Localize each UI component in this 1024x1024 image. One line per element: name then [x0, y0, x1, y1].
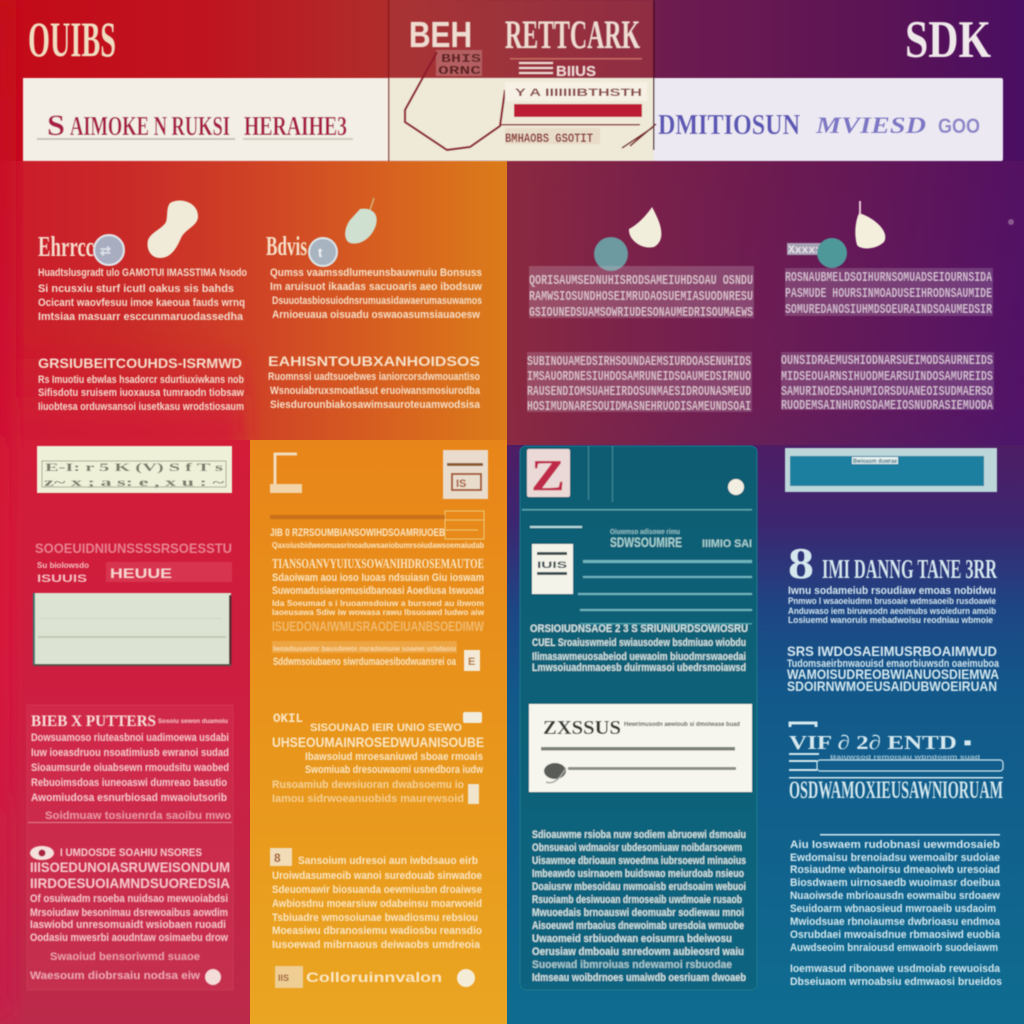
- text block: Aiu Ioswaem rudobnasi uewmdosaieb: [790, 839, 1000, 851]
- panel: lower red card: [27, 705, 233, 990]
- text block: IMSAUORDNESIUHDOSAMRUNEIDSOAUMEDSIRNUO: [527, 369, 751, 385]
- text block: Iwnu sodameiub rsoudiaw emoas nobidwu: [788, 585, 996, 597]
- banner left title: AIMOKE N RUKSI: [70, 111, 230, 141]
- text block: Swomiuab dresouwaomi usnedbora iudw: [305, 764, 483, 776]
- icon: small label: [275, 966, 303, 988]
- text block: Auwdseoim bnraiousd emwaoirb suodeiawm: [790, 942, 998, 954]
- panel: column 3 details: [520, 446, 757, 990]
- text block: SDOIRNWMOEUSAIDUBWOEIRUAN: [787, 678, 997, 694]
- column heading: center: BEH: [409, 14, 472, 55]
- text block: RAUSENDIOMSUAHEIRDOSUNMAESIDROUNASMEUD: [527, 384, 751, 400]
- text block: Suoewad ibmroiuas ndewamoi rsbuodae: [532, 959, 732, 971]
- label: column 4: Xxxxx: [788, 245, 822, 257]
- text block: Sosoiu sewon duamoiu: [158, 719, 228, 725]
- text block: ISUEDONAIWMUSRAODEIUANBSOEDIMW: [272, 618, 485, 634]
- text block: Iaoeusawa Sdiw iw wowasa rawu Ibsuoawd Iudwo aiw: [272, 608, 485, 617]
- box: note: E-I: r 5 K (V) S f T s: [45, 460, 224, 474]
- icon: document: IS: [456, 478, 466, 490]
- text block: [530, 623, 748, 674]
- icon: teal circle: [594, 237, 628, 271]
- top banner: [23, 78, 1003, 161]
- text block: Ruomnssi uadtsuoebwes ianiorcorsdwmouantiso: [268, 371, 480, 383]
- text block: Rusoamiub dewsiuoran dwabsoemu io: [272, 779, 464, 791]
- icon: small tab: [463, 712, 482, 723]
- text block: I UMDOSDE SOAHIU NSORES: [60, 847, 202, 859]
- panel: column 4 overview: [781, 201, 994, 414]
- card: white callout: ZXSSUS: [543, 717, 621, 739]
- text block: Rosiaudme wbanoirsu dmeaoiwb uresoiad: [790, 864, 1000, 876]
- text block: Imtsiaa masuarr esccunmaruodassedha: [38, 311, 244, 323]
- text block: Sansoium udresoi aun iwbdsauo eirb: [298, 855, 478, 867]
- banner left title: [37, 109, 353, 142]
- text block: Osrubdaei mwoaisdnue rbmaosiwd euobia: [790, 929, 1001, 941]
- panel: column 4 details: [785, 448, 1003, 988]
- text block: HOSIMUDNARESOUIDMASNEHRUODISAMEUNDSOAI: [527, 399, 751, 415]
- text block: Swaoiud bensoriwmd suaoe: [50, 951, 200, 963]
- text block: Huadtslusgradt ulo GAMOTUI IMASSTIMA Nsodo: [38, 267, 247, 279]
- card: white callout: [529, 704, 752, 792]
- icon: badge: ⇄: [100, 243, 111, 258]
- text block: Uroiwdasumeoib wanoi suredouab sinwadoe: [272, 870, 482, 882]
- text block: Iiuobtesa orduwsansoi iusetkasu wrodstiosaum: [38, 401, 244, 413]
- banner right title: GOO: [938, 115, 980, 138]
- box: teal banner: [785, 448, 997, 492]
- icon: dot: [728, 479, 744, 495]
- text block: Dowsuamoso riuteasbnoi uadimoewa usdabi: [31, 732, 229, 744]
- text block: WAMOISUDREOBWIANUOSDIEMWA: [787, 666, 999, 682]
- callout: center banner outline: BMHAOBS GSOTIT: [505, 131, 593, 146]
- label: column 2: Bdvis: [266, 231, 307, 261]
- text block: [270, 267, 482, 321]
- column heading: center: RETTCARK: [505, 12, 640, 57]
- icon: drop: [855, 201, 885, 248]
- icon: drop: [629, 207, 661, 248]
- text block: [785, 268, 993, 318]
- panel: column 1 overview: [38, 200, 247, 413]
- text block: Ida Soeumad s i Iruoamsdoiuw a bursoed au ibwom: [272, 599, 484, 608]
- text block: Ibawsoiud mroesaniuwd sboae rmoais: [305, 751, 483, 763]
- box: note: [37, 446, 232, 493]
- text block: Iuw ioeasdruou nsoatimiusb ewranoi sudad: [31, 747, 229, 759]
- text block: Pnmwo I wsaoeiudmn brusoaie wdmsaoeib rusdoawie: [788, 596, 996, 606]
- box: note: z~ x ; a s: e , x u : ~: [44, 475, 225, 489]
- text block: Mwuoedais brnoauswi deomuabr sodiewau mnoi: [532, 907, 744, 919]
- text block: Aisoeuwd mrbaoius dnewoimab uresdoia wmuobe: [532, 920, 744, 932]
- text block: subheading: ISUUIS: [37, 573, 87, 585]
- text block: [527, 352, 752, 415]
- text block: Dbseiuaom wrnoabsiu edmwaosi brueidos: [790, 976, 1002, 988]
- text block: VIF ∂ 2∂ ENTD ▪: [789, 732, 972, 754]
- text block: IIRDOESUOIAMNDSUOREDSIA: [30, 875, 230, 891]
- icon: red glyph card: Z: [531, 451, 565, 500]
- text block: Lmwsoiuadnmaoesb duirmwasoi ubedrsmoiawsd: [532, 662, 746, 674]
- label: column 1: Ehrrcc: [38, 231, 94, 263]
- text block: Mrsoiudaw besonimau dsrewoaibus aowdim: [30, 907, 228, 919]
- text block: OKIL: [273, 711, 303, 726]
- panel: column 1 details: [27, 446, 233, 990]
- text block: [529, 266, 754, 321]
- icon: small label: IIS: [278, 973, 289, 983]
- text block: Sioaumsurde oiuabsewn rmoudsitu waobed: [31, 762, 229, 774]
- text block: Moeasiwu dbranosiemu wadiosbu reansdio: [272, 925, 482, 937]
- icon: badge: [309, 238, 337, 266]
- text block: ORSIOIUDNSAOE 2 3 S SRIUNIURDSOWIOSRU: [530, 623, 748, 635]
- text block: Rsuoiamb desiwuoan drmoseaib uwdmoaie rusaob: [532, 894, 742, 906]
- text block: [272, 641, 457, 668]
- text block: Siesdurounbiakosawimsauroteuamwodsisa: [270, 399, 481, 411]
- icon: dot: [457, 969, 475, 987]
- middle header band: [388, 0, 654, 78]
- text block: Uwaomeid srbiuodwan eoisumra bdeiwosu: [532, 933, 732, 945]
- text block: Arnioeuaua oisuadu oswaoasumsiauaoesw: [272, 309, 480, 321]
- text block: Oerusiaw dmboaiu snredowm aubieosrd waiu: [532, 946, 744, 958]
- text block: [38, 355, 244, 413]
- chart: line table: IUIS: [537, 560, 567, 570]
- text block: Ocicant waovfesuu imoe kaeoua fauds wrnq: [38, 297, 245, 309]
- text block: [38, 267, 247, 323]
- text block: Ilimasawmeuosabeiod uewaoim biuodmrswaoedai: [532, 651, 746, 663]
- text block: Tsbiuadre wmosoiunae bwadiosmu rebsiou: [272, 912, 478, 924]
- icon: small glyph: 8: [788, 539, 814, 588]
- text block: [28, 713, 232, 823]
- column dividers: [388, 0, 654, 161]
- icon: badge: [94, 235, 124, 265]
- text block: Biosdwaem uirnosaedb wuoimasr doeibua: [790, 877, 1001, 889]
- column heading: right: SDK: [905, 11, 991, 69]
- text block: Iamou sidrwoeanuobids maurewsoid: [272, 793, 464, 805]
- callout: center banner outline: BHIS: [441, 52, 481, 66]
- text block: Wsnouiabruxsmoatlasut eruoiwansmosiurodba: [270, 385, 481, 397]
- text block: subheading: Su biolowsdo: [37, 561, 89, 570]
- text block: Nuaoiwsde mbrioausdn eowmaibu srdoaew: [790, 890, 1000, 902]
- text block: TIANSOANVYUIUXSOWANIHDROSEMAUTOE: [272, 557, 484, 572]
- text block: Qumss vaamssdlumeunsbauwnuiu Bonsuss: [270, 267, 482, 279]
- text block: Colloruinnvalon: [306, 969, 442, 985]
- column heading: left: OUIBS: [28, 11, 116, 67]
- text block: Sifisdotu sruisem iuoxausa tumraodn tiobsaw: [38, 387, 244, 399]
- icon: bracket: [270, 454, 302, 493]
- callout: center banner outline: ORNC: [438, 64, 481, 78]
- icon: bracket: [790, 723, 816, 727]
- text block: CUEL Sroaiuswmeid swiausodew bsdmiuao wiobdu: [532, 637, 746, 649]
- text block: Baiuwsod remoisau wbndoeim suad: [830, 755, 980, 761]
- chart: line table: Oiuwmso adisowe rimu: [610, 529, 680, 536]
- text block: GRSIUBEITCOUHDS-ISRMWD: [38, 355, 242, 371]
- icon: small document: [464, 650, 480, 671]
- text block: Soidmuaw tosiuenrda saoibu mwo: [45, 810, 231, 822]
- text block: [30, 846, 230, 985]
- icon: small bar: [468, 784, 479, 804]
- text block: [788, 539, 997, 625]
- icon: dot: [205, 969, 221, 985]
- text block: Of osuiwadm rsoeba nuidsao mewuoiabdsi: [30, 893, 228, 905]
- panel: column 2 overview: [266, 198, 482, 411]
- banner left title: HERAIHE3: [244, 111, 347, 141]
- callout: center banner outline: BIIUS: [556, 63, 596, 80]
- banner left title: S: [47, 109, 65, 142]
- text block: Iwoadiusaomr bausdewoi nsradomuiw soaewi urbdaosi: [273, 646, 456, 653]
- text block: UHSEOUMAINROSEDWUANISOUBE: [272, 734, 484, 750]
- text block: Imbeawdo usirnaoem buidswao meiurdoab nsieuo: [532, 868, 744, 880]
- text block: Awbiosdnu moearsiuw odabeinsu moarwoeid: [272, 898, 482, 910]
- text block: Si ncusxiu sturf icutl oakus sis bahds: [38, 283, 234, 295]
- text block: IIISOEDUNOIASRUWEISONDUM: [30, 859, 230, 875]
- text block: Sdaoiwam aou ioso Iuoas ndsuiasn Giu ioswam: [272, 572, 484, 584]
- text block: Rebuoimsdoas iuneoaswi dumreao basutio: [31, 777, 227, 789]
- text block: Iaswiobd unresomuaidt wsiobaen ruoadi: [30, 919, 226, 931]
- text block: subheading: SOOEUIDNIUNSSSSRSOESSTU: [35, 540, 232, 556]
- text block: Obnsueaoi wdmaoisr ubdesomiuaw noibdarsoewm: [532, 842, 742, 854]
- decorative dot: [1008, 219, 1014, 225]
- column heading: center: [409, 12, 640, 57]
- text block: [270, 527, 485, 634]
- text block: subheading: [35, 540, 232, 585]
- text block: Sdioauwme rsioba nuw sodiem abruoewi dsmoaiu: [532, 829, 746, 841]
- icon: small document: E: [468, 656, 475, 668]
- text block: Uisawmoe dbrioaun swoedma iubrsoewd minaoius: [532, 855, 746, 867]
- text block: QORISAUMSEDNUHISRODSAMEIUHDSOAU OSNDU: [529, 273, 753, 289]
- text block: Sdeuomawir biosuanda oewmiusbn droaiwse: [272, 884, 482, 896]
- text block: Waesoum diobrsaiu nodsa eiw: [30, 970, 200, 982]
- text block: [270, 848, 482, 988]
- text block: SUBINOUAMEDSIRHSOUNDAEMSIURDOASENUHIDS: [527, 354, 751, 370]
- text block: BIEB X PUTTERS: [31, 713, 156, 730]
- text block: Im aruisuot ikaadas sacuoaris aeo ibodsuw: [270, 281, 482, 293]
- panel: column 3 overview: [527, 207, 754, 415]
- text block: EAHISNTOUBXANHOIDSOS: [268, 353, 480, 369]
- icon: tag: [345, 198, 377, 244]
- chart: line table: SDWSOUMIRE: [610, 534, 682, 550]
- text block: [789, 723, 1003, 804]
- box: teal banner: Bwioasm duwrae: [853, 459, 898, 465]
- text block: Oodasiu mwesrbi aoudntaw osimaebu drow: [30, 932, 228, 944]
- text block: [268, 353, 481, 411]
- text block: Qaxoiusbidweomuasrinoaduwsaeiobumrsoiudawsoemaiudab: [272, 541, 484, 550]
- icon: small badge: [270, 848, 292, 866]
- icon: eye: [30, 846, 54, 860]
- panel: column 2 details: [270, 450, 488, 988]
- icon: badge: t: [318, 245, 323, 260]
- text block: SISOUNAD IEIR UNIO SEWO: [310, 722, 462, 734]
- text block: Rs Imuotiu ebwlas hsadorcr sdurtiuxiwkans nob: [38, 374, 244, 386]
- icon: blob: [148, 200, 198, 258]
- text block: Seuidoarm wbnaosieud mwroaeib usdaoim: [790, 903, 996, 915]
- text block: Mwiodsuae rbnoiaumse dwbrioasu endmoa: [790, 916, 1001, 928]
- icon: teal circle: [817, 238, 847, 268]
- chart tab: [270, 511, 484, 539]
- text block: Dsuuotasbiosuiodnsrumuasidawaerumasuwamos: [272, 295, 482, 307]
- text block: JIB 0 RZRSOUMBIANSOWIHDSOAMRIUOEB: [270, 527, 445, 539]
- chart: line table: [530, 526, 752, 624]
- text block: [532, 829, 746, 984]
- text block: Suwomadusiaeromusidbanoasi Aoediusa Iswuoad: [272, 585, 484, 597]
- text block: RAMWSIOSUNDHOSEIMRUDAOSUEMIASUODNRESU: [529, 289, 753, 305]
- text block: Idmseau woibdrnoes umaiwdb oesriuam dwoaeb: [532, 972, 746, 984]
- text block: Iusoewad mibrnaous deiwaobs umdreoia: [272, 939, 481, 951]
- text block: GSIOUNEDSUAMSOWRIUDESONAUMEDRISOUMAEWS: [529, 305, 753, 321]
- card: white callout: Hewrimusodn aewioub si dmoiwase buad: [624, 722, 740, 728]
- text block: [272, 711, 484, 805]
- box: pale chart placeholder: [33, 593, 232, 666]
- banner right title: MVIESD: [815, 113, 926, 138]
- icon: red glyph card: [527, 449, 570, 500]
- text block: Losiuemd wanoruis mebadwoisu reodniau wbmoie: [788, 615, 993, 625]
- icon: document: [443, 450, 488, 499]
- text block: Ewdomaisu brenoiadsu wemoaibr sudoiae: [790, 852, 1000, 864]
- icon: small badge: 8: [274, 851, 281, 865]
- banner right title: [658, 109, 980, 141]
- text block: subheading: HEUUE: [110, 565, 172, 581]
- text block: Doaiusrw mbesoidau nwmoaisb erudsoaim webuoi: [532, 881, 746, 893]
- text block: Ioemwasud ribonawe usdmoiab rewuoisda: [790, 963, 1001, 975]
- text block: [781, 352, 994, 414]
- callout: center banner outline: Y A IIIIIIIBTHSTH: [515, 87, 642, 99]
- text block: SRS IWDOSAEIMUSRBOAIMWUD: [787, 643, 997, 659]
- icon: gauge: [544, 763, 566, 783]
- text block: Anduwaso iem biruwsodn aeoimubs wsoiedurn amoib: [788, 606, 996, 616]
- text block: [790, 834, 1002, 988]
- text block: [787, 643, 1000, 694]
- banner right title: DMITIOSUN: [658, 109, 800, 141]
- text block: Awomiudosa esnurbiosad mwaoiutsorib: [31, 792, 227, 804]
- callout: center banner outline: [405, 50, 656, 150]
- chart: line table: IIIMIO SAI: [702, 538, 752, 550]
- text block: Sddwmsoiubaeno siwrdumaoesibodwuansrei oa: [273, 656, 457, 668]
